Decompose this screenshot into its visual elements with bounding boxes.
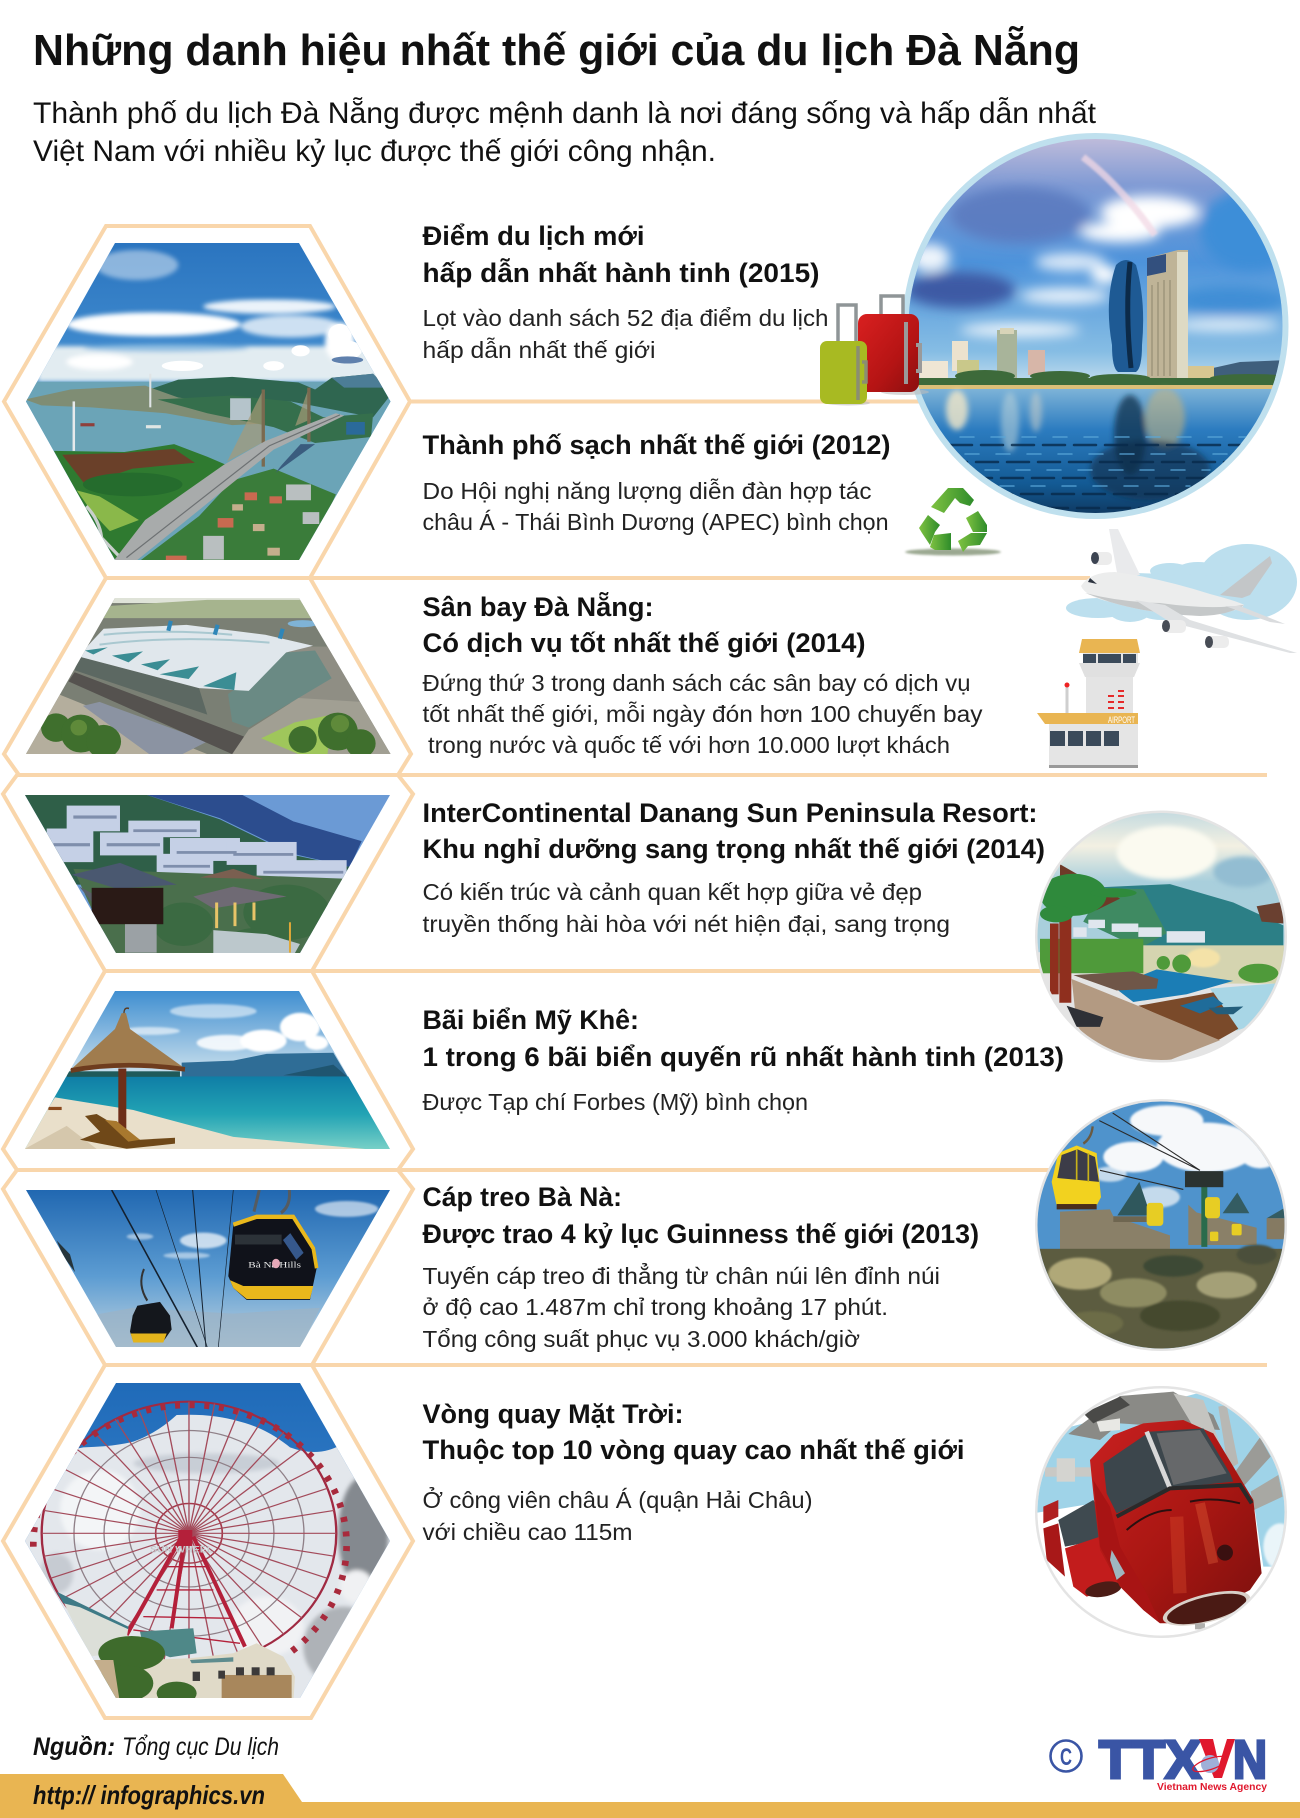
photo: Da Nang airport hexagon [21, 595, 398, 758]
text block: sun wheel: Ở công viên châu Á (quận Hải Châu) [422, 1485, 812, 1513]
photo: Da Nang bay bridge hexagon [21, 239, 398, 567]
subtitle: Thành phố du lịch Đà Nẵng được mệnh danh là nơi đáng sống và hấp dẫn nhất [33, 97, 1097, 130]
text block: resort: truyền thống hài hòa với nét hiện đại, sang trọng [422, 911, 950, 937]
text block: new destination: hấp dẫn nhất hành tinh (2015) [422, 257, 820, 288]
source note: Nguồn: [33, 1733, 115, 1761]
text block: sun wheel: Thuộc top 10 vòng quay cao nhất thế giới [422, 1435, 964, 1465]
copyright icon: C [1060, 1744, 1072, 1771]
text block: cleanest city: Do Hội nghị năng lượng diễn đàn hợp tác [422, 478, 872, 504]
subtitle [33, 97, 1097, 168]
text block: airport: Đứng thứ 3 trong danh sách các sân bay có dịch vụ [422, 670, 970, 696]
subtitle: Việt Nam với nhiều kỷ lục được thế giới công nhận. [33, 135, 716, 168]
text block: airport [422, 590, 983, 758]
text block: cleanest city: châu Á - Thái Bình Dương (APEC) bình chọn [422, 509, 888, 535]
text block: airport: tốt nhất thế giới, mỗi ngày đón hơn 100 chuyến bay [422, 701, 983, 727]
text block: new destination: Lọt vào danh sách 52 địa điểm du lịch [422, 305, 828, 331]
hexagon frames and divider lines [3, 226, 1267, 1718]
text block: resort: InterContinental Danang Sun Peninsula Resort: [422, 798, 1038, 828]
icon: airport tower [1037, 639, 1140, 768]
text block: resort: Khu nghỉ dưỡng sang trọng nhất thế giới (2014) [422, 834, 1045, 864]
photo: Ba Na cable car trapezoid: Bà Nà Hills [248, 1260, 301, 1270]
title: Những danh hiệu nhất thế giới của du lịch Đà Nẵng [33, 24, 1080, 75]
text block: airport: Có dịch vụ tốt nhất thế giới (2014) [422, 628, 866, 658]
photo: Sun Wheel hexagon [20, 1380, 397, 1705]
text block: cable car: Cáp treo Bà Nà: [422, 1182, 622, 1212]
text block: beach: Được Tạp chí Forbes (Mỹ) bình chọn [422, 1089, 808, 1115]
text block: sun wheel: Vòng quay Mặt Trời: [422, 1399, 684, 1429]
text block: sun wheel [422, 1399, 964, 1545]
text block: beach: 1 trong 6 bãi biển quyến rũ nhất hành tinh (2013) [422, 1042, 1064, 1072]
text block: airport: Sân bay Đà Nẵng: [422, 590, 654, 622]
text block: cleanest city [422, 430, 890, 535]
icon: suitcases [820, 296, 929, 406]
text block: new destination: hấp dẫn nhất thế giới [422, 337, 656, 363]
text block: cable car: ở độ cao 1.487m chỉ trong khoảng 17 phút. [422, 1294, 888, 1320]
text block: cable car: Tuyến cáp treo đi thẳng từ chân núi lên đỉnh núi [422, 1261, 940, 1289]
text block: resort [422, 798, 1045, 937]
photo: Ba Na cable car trapezoid [20, 1187, 393, 1349]
text block: sun wheel: với chiều cao 115m [422, 1519, 632, 1545]
photo: Da Nang skyline circle [902, 133, 1300, 524]
footer url: http:// infographics.vn [33, 1780, 265, 1810]
photo: InterContinental resort trapezoid [20, 794, 393, 956]
logo: TTXVN: TTX [1099, 1730, 1201, 1790]
text block: cable car: Tổng công suất phục vụ 3.000 khách/giờ [422, 1326, 860, 1352]
logo: TTXVN: N [1233, 1730, 1267, 1790]
photo: My Khe beach trapezoid [20, 989, 393, 1152]
photo: Sun Wheel hexagon: SUN WHEEL [150, 1545, 214, 1555]
icon: airplane with clouds [1066, 529, 1297, 653]
photo: resort pool circle [1033, 810, 1290, 1062]
text block: airport: trong nước và quốc tế với hơn 10.000 lượt khách [428, 732, 950, 758]
icon: airport tower: AIRPORT [1108, 715, 1135, 725]
text block: beach: Bãi biển Mỹ Khê: [422, 1005, 639, 1035]
text block: resort: Có kiến trúc và cảnh quan kết hợp giữa vẻ đẹp [422, 879, 922, 905]
footer band [0, 1774, 1300, 1818]
text block: new destination [422, 221, 828, 363]
icon: recycle [905, 488, 1001, 556]
logo: TTXVN: Vietnam News Agency [1157, 1781, 1267, 1793]
text block: cable car: Được trao 4 kỷ lục Guinness thế giới (2013) [422, 1219, 979, 1249]
photo: Ba Na Hills castle circle [1033, 1098, 1290, 1356]
text block: beach [422, 1005, 1064, 1115]
logo: TTXVN [1099, 1730, 1267, 1793]
copyright icon [1050, 1740, 1082, 1772]
text block: new destination: Điểm du lịch mới [422, 221, 644, 251]
text block: cable car [422, 1182, 979, 1352]
photo: red ferris wheel cabin circle [1033, 1386, 1297, 1643]
text block: cleanest city: Thành phố sạch nhất thế giới (2012) [422, 430, 890, 460]
source note: Tổng cục Du lịch [122, 1733, 279, 1761]
